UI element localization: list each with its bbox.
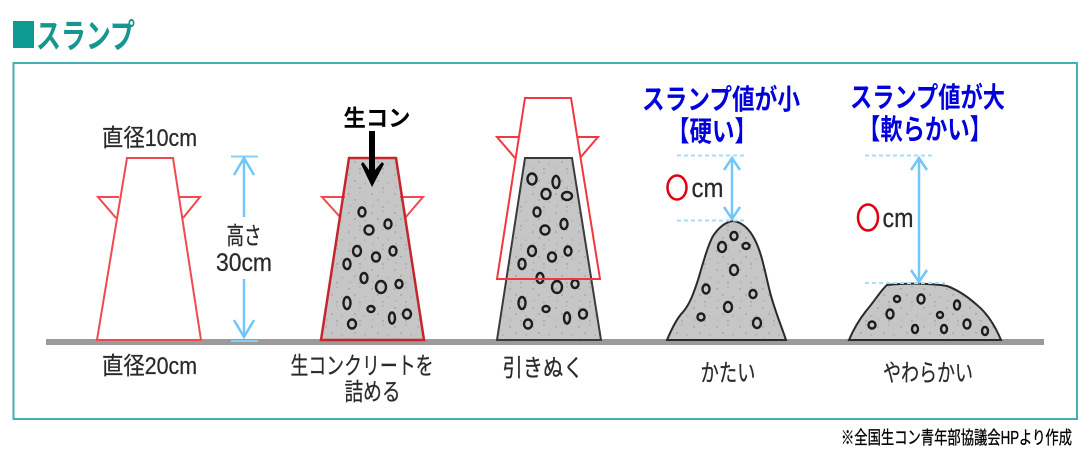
heading: large slump: スランプ値が大 [850, 81, 1005, 113]
stones [518, 174, 587, 328]
label: fill with concrete [290, 353, 434, 406]
label: fresh concrete: 生コン [344, 105, 410, 131]
step 4: stiff mound [667, 221, 786, 340]
heading: large slump [850, 81, 1005, 145]
panel: slump test frame [14, 63, 1077, 419]
step 2: filled cone [321, 158, 424, 340]
label: stiff: かたい [700, 360, 756, 387]
arrow: pour concrete [361, 131, 384, 187]
label: soft: やわらかい [883, 360, 973, 387]
label: bottom diameter: 直径20cm [102, 353, 197, 380]
label: height: 高さ [226, 223, 262, 250]
stones [698, 232, 761, 328]
step 3: lifted cone [497, 98, 601, 340]
step 5: soft mound [849, 284, 1001, 340]
title: スランプ [36, 18, 135, 56]
stiff slump dimension [668, 156, 746, 220]
stiff slump dimension: cm [692, 173, 724, 203]
value placeholder [858, 204, 878, 230]
title [13, 18, 135, 56]
label: top diameter: 直径10cm [102, 125, 197, 152]
heading: small slump: スランプ値が小 [642, 83, 800, 115]
label: height value: 30cm [216, 249, 272, 277]
ground line [46, 339, 1044, 345]
label: fill with concrete: 生コンクリートを [290, 353, 434, 380]
stones [344, 208, 411, 328]
heading: small slump [642, 83, 800, 147]
label: pull out: 引きぬく [502, 355, 584, 382]
label: fill with concrete: 詰める [344, 379, 400, 406]
heading: small slump: 【硬い】 [667, 116, 757, 147]
value placeholder [668, 176, 686, 200]
lifted red cone [497, 98, 600, 279]
height dimension arrow [226, 156, 262, 341]
stones [868, 294, 988, 335]
heading: large slump: 【軟らかい】 [858, 114, 992, 145]
step 1: empty cone [97, 125, 201, 340]
soft slump dimension [858, 156, 945, 283]
soft slump dimension: cm [882, 203, 914, 233]
